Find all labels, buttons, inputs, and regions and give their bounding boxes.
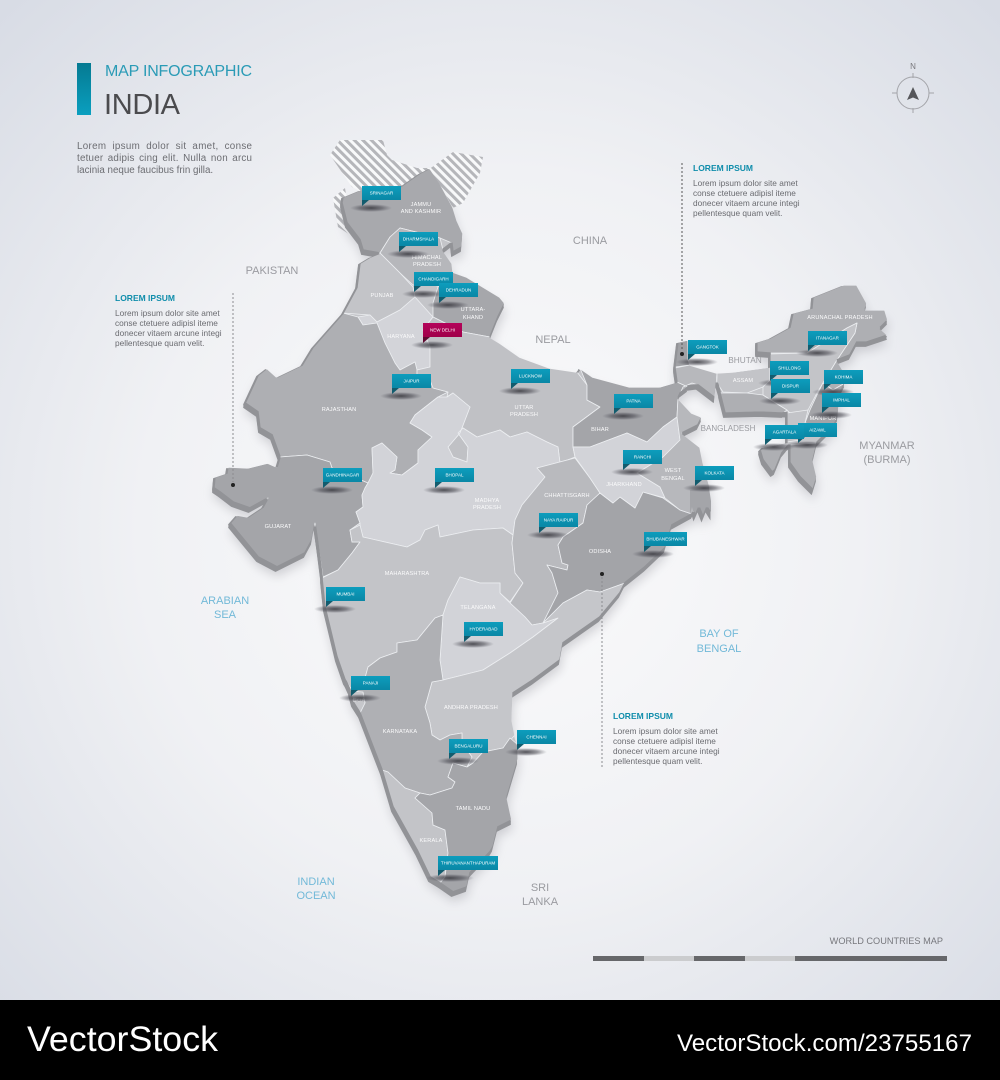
icon: compass: N: [910, 62, 916, 71]
state: Uttarakhand: [433, 272, 505, 337]
sea labels: [201, 595, 741, 902]
pin: New Delhi capital: [411, 323, 462, 349]
neighbouring country labels: BANGLADESH: [701, 424, 756, 433]
state: Maharashtra: [322, 525, 523, 690]
callout: top right: LOREM IPSUM: [693, 163, 753, 173]
map state labels: MANIPUR: [810, 416, 836, 422]
pin: Gangtok: GANGTOK: [696, 345, 719, 350]
map credit label: WORLD COUNTRIES MAP: [830, 936, 943, 946]
callout: bottom: donecer vitaem arcune integi: [613, 746, 720, 756]
pin: Dehradun: [427, 283, 478, 309]
disputed territory hatching: [330, 140, 483, 240]
pin: Mumbai: [314, 587, 365, 613]
pin: Kolkata: KOLKATA: [704, 471, 725, 476]
pin: Ranchi: RANCHI: [634, 455, 651, 460]
neighbouring country labels: BHUTAN: [728, 355, 762, 365]
pin: Chandigarh: CHANDIGARH: [418, 277, 449, 282]
pin: Chandigarh: [402, 272, 453, 298]
pin: Bhubaneshwar: BHUBANESHWAR: [646, 537, 685, 542]
map state labels: AND KASHMIR: [401, 209, 441, 215]
map state labels: GOA: [353, 698, 366, 704]
state: Jharkhand: [573, 417, 680, 508]
state: Sikkim: [675, 340, 690, 367]
callout: left: LOREM IPSUM: [115, 293, 175, 303]
pin: Thiruvananthapuram: [426, 856, 498, 882]
map state labels: JHARKHAND: [606, 482, 642, 488]
map state labels: KERALA: [420, 838, 443, 844]
map state labels: HIMACHAL: [412, 255, 442, 261]
pin: Patna: [602, 394, 653, 420]
map state labels: PUNJAB: [371, 293, 394, 299]
mainland silhouette: [214, 168, 717, 892]
pin: Itanagar: ITANAGAR: [816, 336, 840, 341]
neighbouring country labels: NEPAL: [535, 334, 571, 346]
state: Tripura strip: [787, 410, 808, 442]
pin: Dharmshala: DHARMSHALA: [403, 237, 434, 242]
map state labels: PRADESH: [510, 412, 538, 418]
header accent bar: [77, 63, 91, 115]
pin: Gandhinagar: [311, 468, 362, 494]
map state labels: GUJARAT: [265, 524, 292, 530]
callout: left: conse ctetuere adipisl iteme: [115, 318, 218, 328]
map state labels: HARYANA: [387, 334, 415, 340]
callout: top right: conse ctetuere adipisl iteme: [693, 188, 796, 198]
pin: Agartala: AGARTALA: [773, 430, 796, 435]
pin: Mumbai: MUMBAI: [336, 592, 354, 597]
pin: Agartala: [753, 425, 804, 451]
neighbouring country labels: SRI: [531, 882, 549, 894]
pin: Ranchi: [611, 450, 662, 476]
pin: Chennai: CHENNAI: [526, 735, 547, 740]
pin: Bhubaneshwar: [632, 532, 687, 558]
state: Kerala: [382, 770, 448, 883]
state: Telangana: [440, 577, 558, 680]
icon: compass: [892, 62, 934, 113]
map state labels: ODISHA: [589, 549, 611, 555]
pin: Aizawl: [786, 423, 837, 449]
map state labels: CHHATTISGARH: [544, 493, 590, 499]
map state labels: JAMMU: [411, 202, 431, 208]
state: Tripura: [760, 447, 787, 472]
pin: Srinagar: SRINAGAR: [370, 191, 394, 196]
pin: Lucknow: [499, 369, 550, 395]
state: Mizoram: [790, 443, 817, 490]
map state labels: RAJASTHAN: [322, 407, 356, 413]
intro text: lacinia neque faucibus frin gilla.: [77, 165, 213, 176]
pin: Dispur: DISPUR: [782, 384, 800, 389]
callout: bottom: LOREM IPSUM: [613, 711, 673, 721]
callout: top right: Lorem ipsum dolor site amet: [693, 178, 798, 188]
map state labels: ARUNACHAL PRADESH: [807, 315, 873, 321]
intro text: tetuer adipis cing elit. Nulla non arcu: [77, 153, 252, 164]
pin: Naya Raipur: NAYA RAIPUR: [544, 518, 574, 523]
callout: top right: [680, 163, 800, 356]
pin: Thiruvananthapuram: THIRUVANANTHAPURAM: [441, 861, 495, 866]
map state labels: UTTARA-: [461, 307, 485, 313]
pin: Bhopal: [423, 468, 474, 494]
pin: Chennai: [505, 730, 556, 756]
callout: bottom: conse ctetuere adipisl iteme: [613, 736, 716, 746]
footer logo text: VectorStock: [27, 1020, 219, 1059]
pin: Jaipur: JAIPUR: [403, 379, 420, 384]
pin: Shillong: [758, 361, 809, 387]
neighbouring country labels: PAKISTAN: [246, 265, 298, 277]
state: Rajasthan: [245, 313, 448, 483]
state: Meghalaya: [720, 393, 787, 413]
sea labels: BAY OF: [699, 628, 739, 640]
pin: Imphal: IMPHAL: [833, 398, 850, 403]
pin: New Delhi capital: NEW DELHI: [430, 328, 455, 333]
intro text: Lorem ipsum dolor sit amet, conse: [77, 141, 253, 152]
callout: top right: donecer vitaem arcune integi: [693, 198, 800, 208]
sea labels: ARABIAN: [201, 595, 249, 607]
callout: left: pellentesque quam velit.: [115, 338, 204, 348]
pin: Gangtok: [676, 340, 727, 366]
north-east silhouette: [717, 285, 888, 490]
heading: map infographic: MAP INFOGRAPHIC: [105, 63, 252, 80]
callout: bottom: [600, 572, 720, 767]
pin: Dehradun: DEHRADUN: [446, 288, 471, 293]
pin: Dharmshala: [387, 232, 438, 258]
map: India states: [214, 168, 888, 892]
pin: Bengaluru: [437, 739, 488, 765]
state: Uttar Pradesh: [417, 317, 600, 463]
sea labels: INDIAN: [297, 876, 335, 888]
state: West Bengal: [637, 365, 717, 514]
pin: Aizawl: AIZAWL: [809, 428, 826, 433]
state: Haryana: [358, 297, 433, 370]
state: Madhya Pradesh: [356, 393, 575, 547]
pin: Itanagar: [796, 331, 847, 357]
map state labels: BENGAL: [661, 476, 685, 482]
pin: Patna: PATNA: [626, 399, 641, 404]
state: Manipur: [805, 383, 845, 427]
intro text: [77, 141, 253, 176]
neighbouring country labels: MYANMAR: [859, 440, 915, 452]
map state labels: PRADESH: [473, 505, 501, 511]
pin: Gandhinagar: GANDHINAGAR: [326, 473, 360, 478]
state: Arunachal Pradesh: [757, 285, 888, 360]
pin: Lucknow: LUCKNOW: [519, 374, 543, 379]
callout: bottom: Lorem ipsum dolor site amet: [613, 726, 718, 736]
title: India: INDIA: [104, 89, 181, 121]
sea labels: SEA: [214, 609, 237, 621]
map state labels: ANDHRA PRADESH: [444, 705, 498, 711]
map state labels: TELANGANA: [460, 605, 496, 611]
pin: Hyderabad: HYDERABAD: [469, 627, 498, 632]
pin: Kolkata: [683, 466, 734, 492]
pin: Hyderabad: [452, 622, 503, 648]
map state labels: KHAND: [463, 315, 483, 321]
map state labels: MADHYA: [475, 498, 499, 504]
pin: Kohima: KOHIMA: [835, 375, 852, 380]
pin: Panaji: [339, 676, 390, 702]
neighbouring country labels: (BURMA): [863, 454, 911, 466]
map state labels: MAHARASHTRA: [385, 571, 429, 577]
map state labels: KARNATAKA: [383, 729, 417, 735]
pin: Srinagar: [350, 186, 401, 212]
state: Assam: [763, 323, 857, 413]
pin: Shillong: SHILLONG: [778, 366, 801, 371]
scale bar: [593, 956, 947, 961]
map state labels: [265, 202, 873, 844]
neighbouring country labels: LANKA: [522, 896, 559, 908]
map state labels: ASSAM: [733, 378, 753, 384]
state: Karnataka: [352, 615, 472, 795]
state: Assam west: [717, 367, 770, 393]
pin: Bhopal: BHOPAL: [446, 473, 464, 478]
state: Sundarbans: [690, 487, 712, 518]
callout: left: [115, 293, 235, 487]
state: Gujarat: [214, 455, 368, 577]
map state labels: WEST: [665, 468, 682, 474]
pin: Naya Raipur: [527, 513, 578, 539]
sea labels: BENGAL: [697, 643, 741, 655]
state: Andhra Pradesh: [425, 583, 625, 767]
state: Punjab: [343, 253, 415, 322]
footer image id: VectorStock.com/23755167: [677, 1030, 972, 1057]
state: Chhattisgarh: [510, 458, 600, 625]
pin: Bengaluru: BENGALURU: [454, 744, 483, 749]
pin: Kohima: [812, 370, 863, 396]
map state labels: TAMIL NADU: [456, 806, 490, 812]
pin: Dispur: [759, 379, 810, 405]
state: Bihar: [573, 368, 688, 447]
state: Goa: [350, 691, 365, 713]
state: Tamil Nadu: [415, 738, 518, 892]
callout: left: Lorem ipsum dolor site amet: [115, 308, 220, 318]
map state labels: UTTAR: [515, 405, 533, 411]
callout: top right: pellentesque quam velit.: [693, 208, 782, 218]
pin: Panaji: PANAJI: [363, 681, 378, 686]
state: Odisha: [543, 492, 692, 623]
pin: Jaipur: [380, 374, 431, 400]
callout: bottom: pellentesque quam velit.: [613, 756, 702, 766]
pin: Imphal: [810, 393, 861, 419]
map state labels: PRADESH: [413, 262, 441, 268]
footer band: [0, 1000, 1000, 1080]
state: Nagaland: [823, 360, 845, 390]
map state labels: BIHAR: [591, 427, 609, 433]
neighbouring country labels: CHINA: [573, 235, 608, 247]
sea labels: OCEAN: [296, 890, 336, 902]
state: Jammu and Kashmir: [342, 168, 463, 253]
neighbouring country labels: [246, 235, 915, 908]
state: Himachal Pradesh: [380, 228, 453, 287]
callout: left: donecer vitaem arcune integi: [115, 328, 222, 338]
